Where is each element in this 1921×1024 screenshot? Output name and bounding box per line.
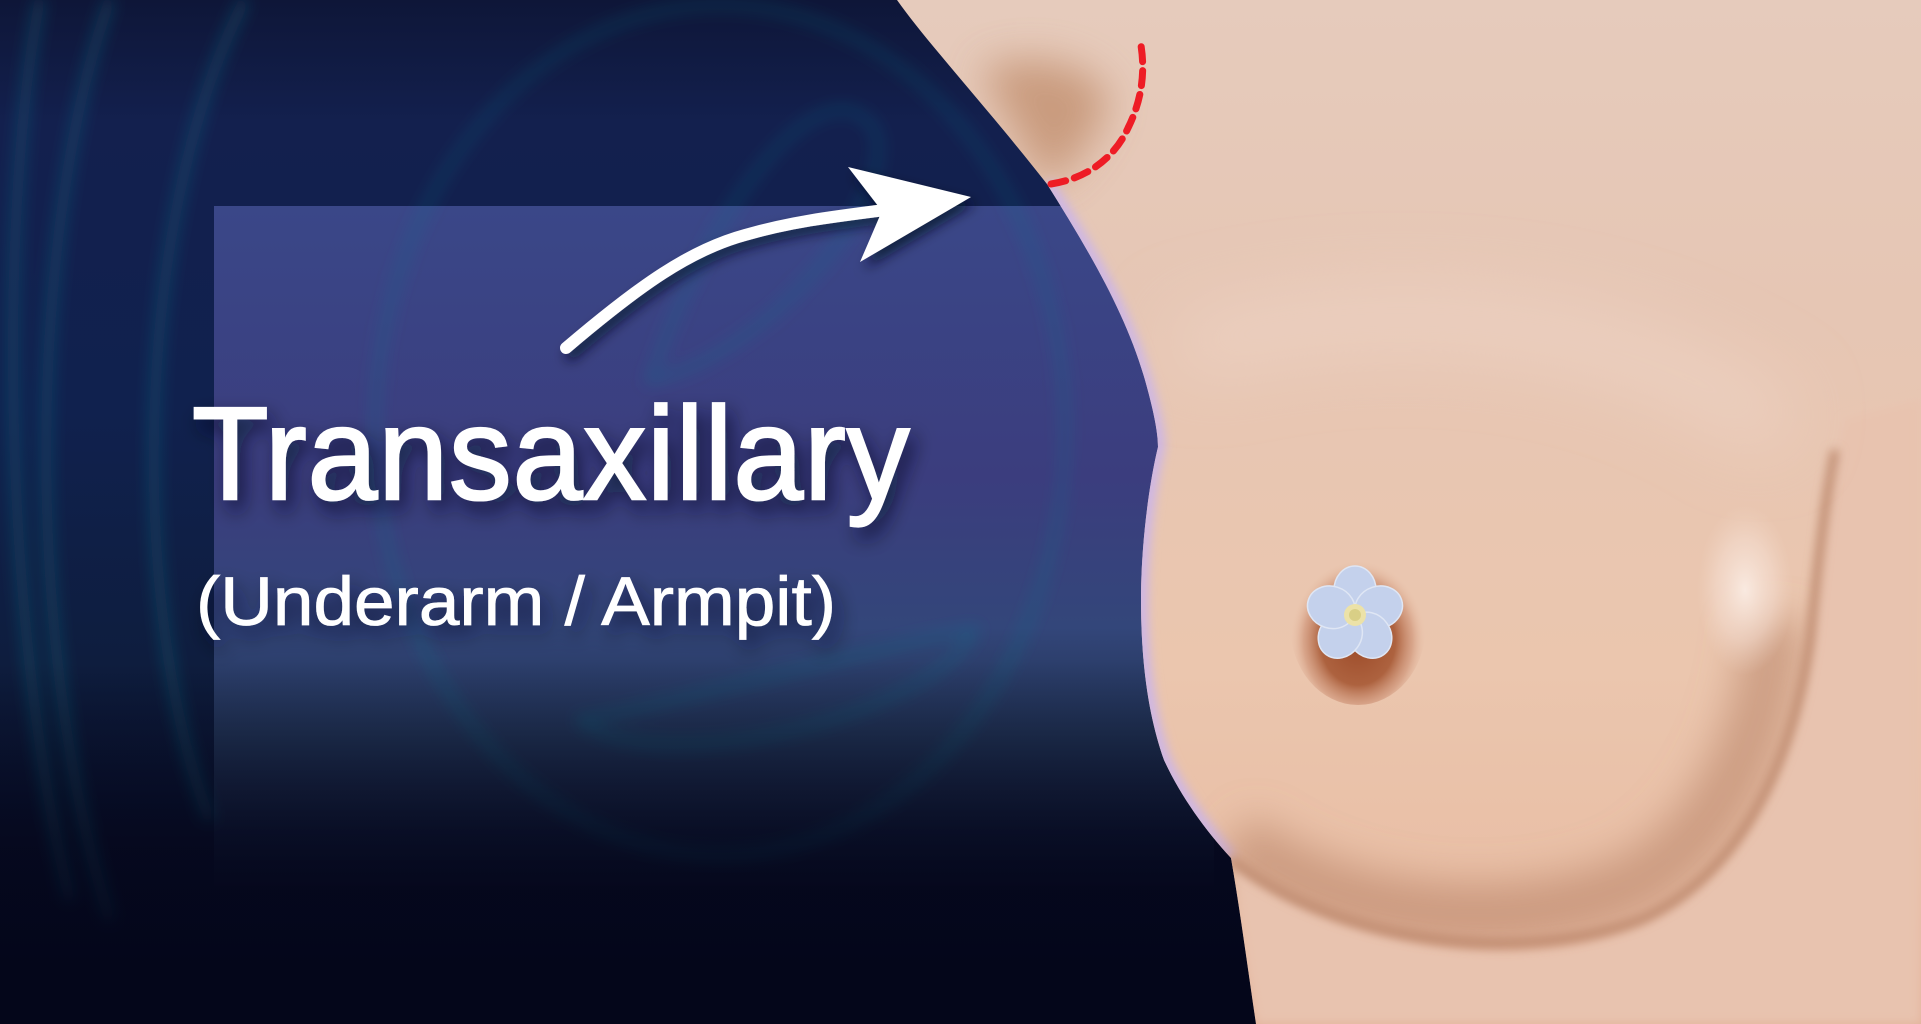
crease line bbox=[1231, 450, 1835, 943]
title: Transaxillary bbox=[192, 380, 910, 528]
area below crease bbox=[1232, 648, 1921, 1024]
bottom fade bbox=[0, 660, 1300, 1024]
arrow pointing to armpit bbox=[566, 167, 971, 348]
torso and breast skin bbox=[880, 0, 1921, 1024]
areola bbox=[1290, 545, 1426, 705]
armpit shading bbox=[980, 60, 1110, 185]
subtitle: (Underarm / Armpit) bbox=[196, 563, 836, 640]
background pattern: teal contour lines bbox=[13, 0, 1065, 920]
icon: flower cover bbox=[1302, 566, 1408, 667]
background panel: blue rectangle bbox=[214, 206, 1214, 886]
incision line: red dashed bbox=[1051, 40, 1143, 184]
gloss highlight bbox=[1707, 524, 1784, 666]
lilac edge glow bbox=[1047, 184, 1231, 858]
underside shadow wide bbox=[1235, 620, 1775, 914]
upper chest highlight bbox=[1240, 310, 1740, 410]
